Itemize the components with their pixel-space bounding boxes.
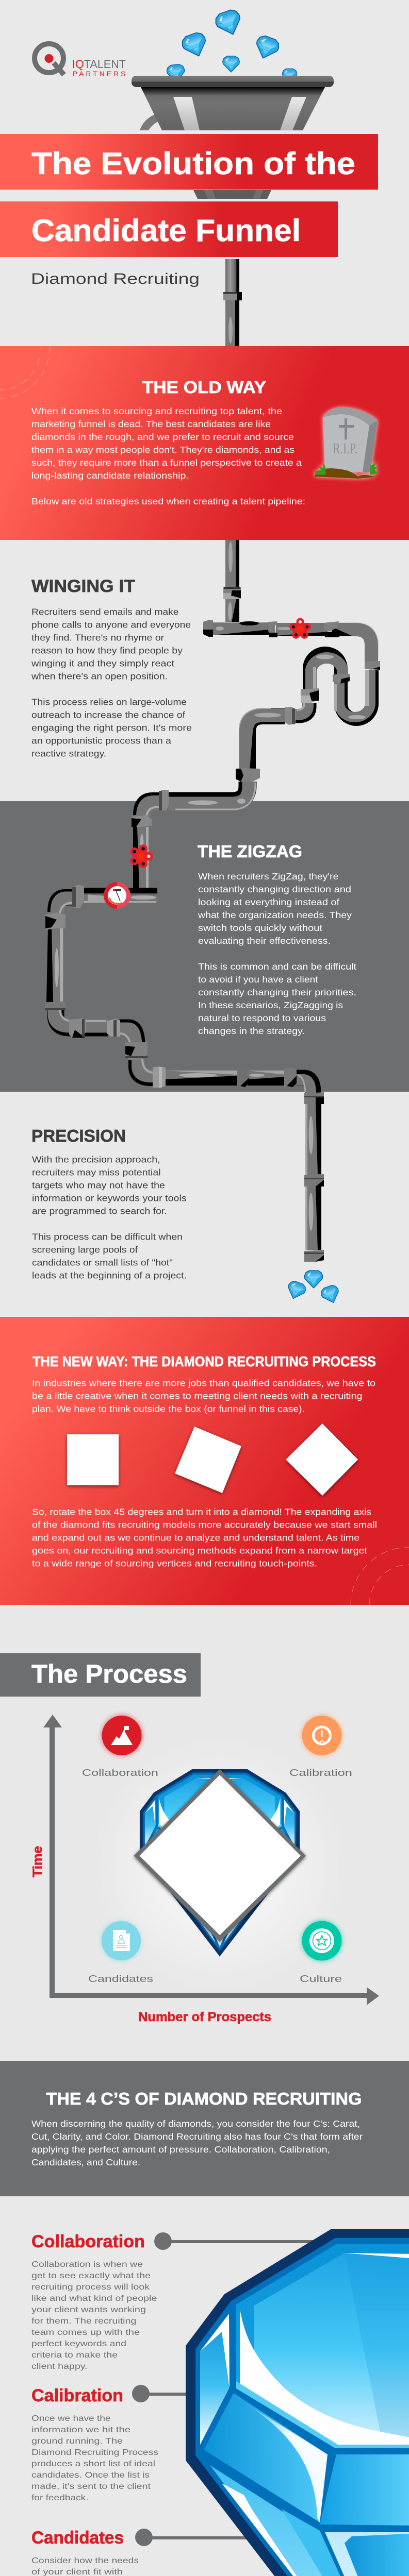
text: new way intro: plan. We have to think outside the box (or funnel in this case). bbox=[32, 1403, 305, 1414]
section: collaboration bbox=[31, 2232, 157, 2371]
heading: the 4 c's: THE 4 C’S OF DIAMOND RECRUITING bbox=[46, 2089, 362, 2108]
icon: culture bbox=[302, 1921, 341, 1961]
text: 4 c's body: Cut, Clarity, and Color. Diamond Recruiting also has four C's that form after bbox=[31, 2131, 363, 2142]
text: candidates body: Consider how the needs bbox=[31, 2556, 139, 2565]
text: winging it body: winging it and they simply react bbox=[31, 658, 174, 669]
text: zigzag body: constantly changing direction and bbox=[198, 884, 351, 894]
icon: tombstone: R.I.P. bbox=[333, 441, 357, 457]
axis label: number of prospects: Number of Prospects bbox=[138, 2010, 271, 2024]
text: 4 c's body: Candidates, and Culture. bbox=[31, 2157, 140, 2167]
text: winging it body: This process relies on large-volume bbox=[31, 697, 187, 707]
text: zigzag body: When recruiters ZigZag, they're bbox=[198, 871, 338, 882]
pipe: zigzag lower vertical bbox=[45, 912, 137, 1047]
text: new way intro: be a little creative when it comes to meeting client needs with a recruiting bbox=[32, 1391, 363, 1401]
arrow: time axis bbox=[43, 1715, 62, 1998]
pipe: main vertical below old way bbox=[223, 540, 241, 625]
heading: the new way: THE NEW WAY: THE DIAMOND RECRUITING PROCESS bbox=[32, 1353, 376, 1369]
heading: the process: The Process bbox=[31, 1659, 187, 1688]
text: precision body bbox=[32, 1154, 187, 1281]
logo: IQTalent Partners bbox=[35, 44, 126, 78]
text: old way body: marketing funnel is dead. The best candidates are like bbox=[31, 419, 271, 429]
pipe: s-bend bbox=[239, 653, 372, 770]
text: calibration body: candidates. Once the list is bbox=[31, 2471, 150, 2480]
connector: calibration bbox=[132, 2385, 190, 2402]
text: new way explanation: and expand out as we continue to analyze and understand talent. As time bbox=[32, 1532, 359, 1543]
text: old way body bbox=[31, 406, 305, 506]
pipe: final vertical bbox=[304, 1092, 324, 1262]
heading: collaboration: Collaboration bbox=[31, 2232, 145, 2251]
heading: winging it: WINGING IT bbox=[31, 577, 135, 596]
text: zigzag body: evaluating their effectiveness. bbox=[198, 936, 331, 946]
icon: large diamond bbox=[186, 2229, 409, 2576]
text: new way explanation: of the diamond fits recruiting models more accurately because we start small bbox=[32, 1519, 377, 1530]
text: precision body: information or keywords your tools bbox=[32, 1193, 187, 1204]
pipe: main vertical top bbox=[223, 259, 242, 346]
pipe: upper zigzag elbow bbox=[142, 768, 260, 816]
text: precision body: targets who may not have the bbox=[32, 1180, 165, 1190]
text: collaboration body: like and what kind of people bbox=[31, 2294, 157, 2303]
section: candidates bbox=[31, 2528, 139, 2576]
text: collaboration body: for them. The recruiting bbox=[31, 2317, 136, 2326]
text: winging it body: they find. There's no rhyme or bbox=[31, 633, 164, 643]
text: precision body: leads at the beginning of a project. bbox=[32, 1270, 187, 1281]
text: calibration body: made, it's sent to the client bbox=[31, 2482, 151, 2491]
text: collaboration body: perfect keywords and bbox=[31, 2340, 126, 2348]
text: calibration body bbox=[31, 2414, 158, 2502]
title bar 1 bbox=[0, 134, 378, 190]
icon: calibration bbox=[302, 1716, 341, 1755]
text: zigzag body: constantly changing their priorities. bbox=[198, 987, 356, 997]
icon: rotated square bbox=[175, 1427, 241, 1493]
text: candidates body bbox=[31, 2556, 139, 2576]
text: collaboration body: client happy. bbox=[31, 2362, 88, 2371]
icon: red valve bbox=[130, 844, 153, 868]
panel: the old way bbox=[0, 346, 409, 540]
text: zigzag body: what the organization needs. They bbox=[198, 910, 352, 920]
text: new way explanation: to a wide range of sourcing vertices and recruiting touch-points. bbox=[32, 1558, 317, 1568]
pipe: horizontal with valve bbox=[203, 618, 380, 670]
text: calibration body: ground running. The bbox=[31, 2437, 123, 2446]
text: zigzag body bbox=[198, 871, 356, 1036]
pipe: horizontal with gauge bbox=[56, 882, 157, 913]
text: calibration body: produces a short list of ideal bbox=[31, 2460, 155, 2468]
panel: the new way bbox=[0, 1317, 409, 1605]
text: collaboration body: criteria to make the bbox=[31, 2351, 118, 2360]
icon: diamond square bbox=[286, 1423, 358, 1496]
icon: falling diamonds bbox=[166, 8, 297, 83]
text: calibration body: Diamond Recruiting Process bbox=[31, 2448, 158, 2457]
text: collaboration body bbox=[31, 2260, 157, 2371]
text: old way body: such, they require more than a funnel perspective to create a bbox=[31, 457, 302, 468]
icon: pressure gauge bbox=[104, 882, 130, 909]
pipe: bottom of zigzag bbox=[125, 1042, 313, 1093]
text: new way explanation: So, rotate the box 45 degrees and turn it into a diamond! The expanding axis bbox=[32, 1506, 371, 1517]
text: calibration body: for feedback. bbox=[31, 2494, 89, 2502]
text: precision body: screening large pools of bbox=[32, 1245, 138, 1255]
text: winging it body bbox=[31, 607, 192, 758]
text: 4 c's body bbox=[31, 2119, 363, 2167]
title bar 2 bbox=[0, 201, 338, 257]
text: collaboration body: Collaboration is when we bbox=[31, 2260, 143, 2269]
icon: collaboration bbox=[102, 1716, 141, 1755]
text: winging it body: an opportunistic process than a bbox=[31, 736, 171, 746]
text: collaboration body: recruiting process will look bbox=[31, 2283, 150, 2292]
heading: candidates: Candidates bbox=[31, 2528, 124, 2548]
text: winging it body: outreach to increase the chance of bbox=[31, 710, 185, 720]
heading: the zigzag: THE ZIGZAG bbox=[198, 842, 302, 861]
panel: the process background bbox=[0, 1605, 409, 2061]
icon: tombstone bbox=[315, 408, 378, 479]
text: calibration body: information we hit the bbox=[31, 2426, 130, 2434]
text: zigzag body: In these scenarios, ZigZagging is bbox=[198, 1000, 343, 1010]
connector: candidates bbox=[135, 2529, 250, 2546]
icon: diamonds from pipe bbox=[285, 1270, 342, 1306]
text: winging it body: when there's an open position. bbox=[31, 671, 168, 681]
panel: the zigzag background bbox=[0, 801, 409, 1092]
text: old way body: Below are old strategies used when creating a talent pipeline: bbox=[31, 496, 305, 506]
panel: the 4 c's bbox=[0, 2061, 409, 2196]
text: precision body: With the precision approach, bbox=[32, 1154, 160, 1164]
heading: the process bbox=[0, 1653, 201, 1697]
axis label: time: Time bbox=[30, 1846, 45, 1877]
text: zigzag body: natural to respond to various bbox=[198, 1013, 326, 1023]
text: precision body: candidates or small lists of "hot" bbox=[32, 1257, 173, 1267]
label: candidates: Candidates bbox=[88, 1973, 153, 1984]
label: calibration: Calibration bbox=[289, 1767, 352, 1778]
text: collaboration body: your client wants working bbox=[31, 2306, 146, 2314]
text: precision body: recruiters may miss potential bbox=[32, 1167, 161, 1178]
text: precision body: are programmed to search for. bbox=[32, 1206, 167, 1216]
text: new way explanation bbox=[32, 1506, 377, 1568]
icon: candidates bbox=[102, 1921, 141, 1960]
title bar 2: Candidate Funnel bbox=[31, 213, 301, 248]
icon: blue diamond bbox=[140, 1769, 300, 1957]
text: collaboration body: get to see exactly what the bbox=[31, 2272, 151, 2280]
icon: white box rotated bbox=[134, 1769, 306, 1942]
logo: IQTalent Partners: PARTNERS bbox=[73, 70, 125, 78]
icon: square bbox=[67, 1434, 119, 1485]
icon: funnel bbox=[132, 76, 334, 199]
text: new way explanation: goes on, our recruiting and sourcing methods expand from a narrow target bbox=[32, 1545, 367, 1555]
heading: calibration: Calibration bbox=[31, 2386, 123, 2405]
text: collaboration body: team comes up with the bbox=[31, 2328, 140, 2337]
text: winging it body: engaging the right person. It's more bbox=[31, 722, 192, 733]
text: zigzag body: This is common and can be difficult bbox=[198, 961, 356, 972]
icon: red valve bbox=[289, 618, 311, 639]
title bar 1: The Evolution of the bbox=[31, 146, 355, 181]
text: new way intro: In industries where there are more jobs than qualified candidates, we have to bbox=[32, 1378, 375, 1388]
subtitle: Diamond Recruiting bbox=[31, 270, 200, 287]
heading: the old way: THE OLD WAY bbox=[142, 378, 266, 397]
label: culture: Culture bbox=[300, 1973, 342, 1984]
text: old way body: diamonds in the rough, and we prefer to recruit and source bbox=[31, 432, 294, 442]
text: calibration body: Once we have the bbox=[31, 2414, 111, 2423]
text: old way body: When it comes to sourcing and recruiting top talent, the bbox=[31, 406, 282, 416]
heading: precision: PRECISION bbox=[31, 1126, 126, 1145]
text: winging it body: reactive strategy. bbox=[31, 748, 106, 758]
text: new way intro bbox=[32, 1378, 375, 1414]
text: winging it body: phone calls to anyone and everyone bbox=[31, 619, 191, 630]
text: winging it body: reason to how they find people by bbox=[31, 645, 183, 655]
text: zigzag body: looking at everything instead of bbox=[198, 897, 339, 907]
logo: IQTalent Partners: IQTALENT bbox=[72, 58, 126, 71]
label: collaboration: Collaboration bbox=[82, 1767, 158, 1778]
text: zigzag body: to avoid if you have a client bbox=[198, 974, 318, 985]
arrow: prospects axis bbox=[50, 1987, 379, 2005]
text: precision body: This process can be difficult when bbox=[32, 1231, 183, 1242]
text: zigzag body: switch tools quickly without bbox=[198, 923, 322, 933]
pipe: zigzag vertical with valve bbox=[130, 815, 153, 889]
text: winging it body: Recruiters send emails and make bbox=[31, 607, 178, 617]
connector: collaboration bbox=[154, 2232, 318, 2250]
chart: diamond process bbox=[30, 1715, 379, 2024]
text: zigzag body: changes in the strategy. bbox=[198, 1026, 305, 1036]
text: 4 c's body: When discerning the quality of diamonds, you consider the four C's: Carat, bbox=[31, 2119, 360, 2129]
section: calibration bbox=[31, 2386, 158, 2502]
text: 4 c's body: applying the perfect amount of pressure. Collaboration, Calibration, bbox=[31, 2144, 330, 2155]
text: old way body: them in a way most people don't. They're diamonds, and as bbox=[31, 445, 295, 455]
text: old way body: long-lasting candidate relationship. bbox=[31, 470, 189, 481]
